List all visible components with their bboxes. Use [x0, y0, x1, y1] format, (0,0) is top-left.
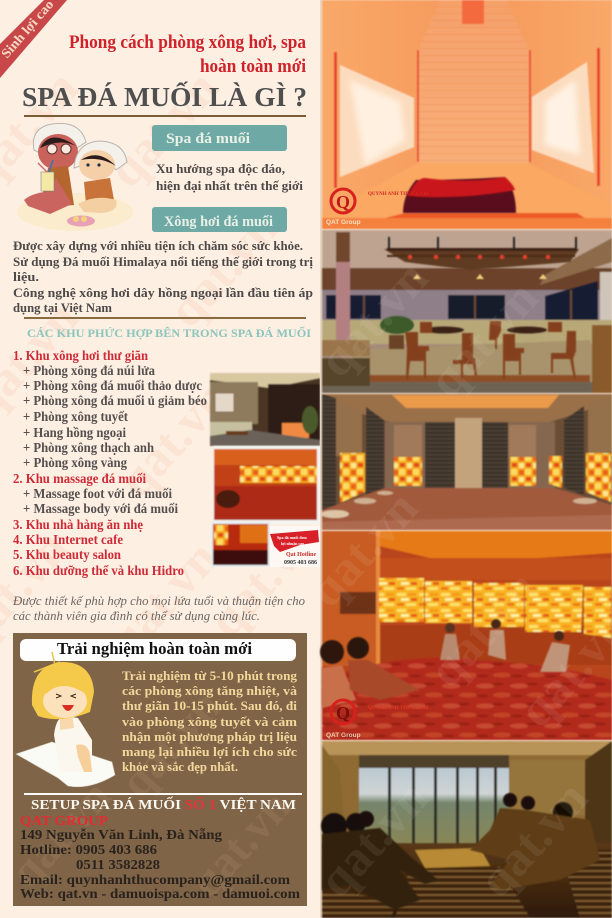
photo watermark: qat.vn	[307, 770, 438, 907]
background watermark: qat.vn	[97, 60, 228, 197]
illustration: towel girl	[16, 652, 115, 787]
panel: new experience and contact: qat.vn	[0, 770, 120, 897]
text: description: liệu.	[13, 269, 39, 284]
contact details: 149 Nguyễn Văn Linh, Đà Nẵng	[20, 827, 222, 842]
red blanket	[403, 177, 516, 213]
text: description: Sử dụng Đá muối Himalaya nổi tiếng thế giới trong trị	[13, 254, 313, 269]
subtitle: Phong cách phòng xông hơi, spa	[69, 33, 306, 53]
list of zones: + Phòng xông đá muối thảo dược	[23, 378, 202, 393]
promo sticker: hotline: lợi nhuận cao	[281, 541, 304, 546]
list of zones	[13, 348, 207, 578]
photo: red room thumbnail	[211, 522, 270, 567]
right boy	[74, 141, 127, 213]
panel: Xông hơi đá muối	[152, 207, 287, 232]
experience text: các phòng xông tăng nhiệt, và	[122, 683, 298, 698]
text: description: Công nghệ xông hơi dây hồng ngoại lần đầu tiên áp	[13, 285, 313, 300]
title block	[22, 33, 307, 112]
contact details	[20, 813, 301, 901]
logo: QAT group: QUYNH ANH THU Co.,Ltd	[368, 192, 429, 197]
photo watermark: qat.vn	[467, 770, 598, 907]
illustration: two spa guests	[17, 123, 133, 231]
logo: QAT group	[326, 189, 429, 226]
photo watermark	[297, 250, 612, 907]
background watermark	[0, 60, 328, 667]
experience text: thư giãn 10-15 phút. Sau đó, đi	[122, 698, 297, 713]
promo sticker: hotline	[270, 526, 320, 567]
logo: QAT group: QUYNH ANH THU Co.,Ltd	[368, 706, 429, 711]
corner ribbon: Sinh lợi cao	[0, 0, 67, 78]
contact details: 0511 3582828	[76, 857, 160, 872]
photo: salt panel room	[321, 394, 612, 530]
list of zones: 6. Khu dưỡng thể và khu Hidro	[13, 563, 184, 578]
background watermark: qat.vn	[97, 530, 228, 667]
left column background	[0, 0, 322, 918]
panel: Spa đá muối	[152, 125, 287, 151]
list of zones: 1. Khu xông hơi thư giãn	[13, 348, 148, 363]
panel heading	[20, 639, 296, 661]
text: description	[13, 238, 313, 315]
photo watermark: qat.vn	[297, 480, 428, 617]
photo watermark: qat.vn	[417, 270, 548, 407]
list of zones: + Massage body với đá muối	[23, 501, 178, 516]
right group of guests	[462, 793, 600, 890]
photo watermark: qat.vn	[417, 560, 548, 697]
text: spa trend: Xu hướng spa độc đáo,	[156, 161, 285, 176]
subtitle	[69, 33, 306, 77]
promo sticker: hotline: 0905 403 686	[284, 560, 317, 566]
experience text: vào phòng xông tuyết và cảm	[122, 714, 297, 729]
pergola	[384, 237, 579, 279]
list of zones: + Phòng xông thạch anh	[23, 440, 154, 455]
list of zones: + Massage foot với đá muối	[23, 486, 172, 501]
background watermark: qat.vn	[157, 200, 288, 337]
promo sticker: hotline: Qat Hotline	[286, 552, 317, 558]
panel: new experience and contact	[0, 633, 307, 907]
text: description: dụng tại Việt Nam	[13, 300, 112, 315]
experience text	[122, 668, 298, 774]
text: spa trend: hiện đại nhất trên thế giới	[156, 178, 303, 193]
list of zones: + Phòng xông tuyết	[23, 409, 128, 424]
panel: new experience and contact: qat.vn	[110, 680, 230, 807]
photo: sauna room	[322, 0, 612, 229]
guests in salt room	[320, 619, 570, 708]
text: description: Được xây dựng với nhiều tiện ích chăm sóc sức khỏe.	[13, 238, 303, 253]
photo: restaurant	[322, 230, 612, 393]
list of zones: + Phòng xông vàng	[23, 455, 127, 470]
contact details: Hotline: 0905 403 686	[20, 842, 157, 857]
note: family friendly: Được thiết kế phù hợp cho mọi lứa tuổi và thuận tiện cho	[12, 594, 306, 608]
bowl	[67, 216, 95, 226]
experience text: nhận một phương pháp trị liệu	[122, 729, 297, 744]
panel: Spa đá muối: Spa đá muối	[166, 131, 250, 147]
photo: lobby	[210, 373, 320, 446]
left girl	[24, 123, 86, 214]
plant	[380, 316, 414, 349]
promo sticker: hotline: Spa đá muối đem	[277, 535, 307, 540]
list of zones: 5. Khu beauty salon	[13, 547, 121, 562]
setup heading: SETUP SPA ĐÁ MUỐI SỐ 1 VIỆT NAM	[31, 795, 296, 813]
experience text: Trải nghiệm từ 5-10 phút trong	[122, 668, 297, 683]
list of zones: 4. Khu Internet cafe	[13, 532, 123, 547]
list of zones: + Phòng xông đá muối ủ giảm béo	[23, 393, 207, 408]
left group of guests	[321, 811, 438, 910]
panel: new experience and contact: qat.vn	[180, 780, 300, 907]
logo: QAT group	[326, 700, 429, 739]
note: family friendly: các thành viên gia đình có thể sử dụng cùng lúc.	[13, 609, 260, 623]
dining tables and chairs	[405, 321, 576, 380]
list of zones: + Phòng xông đá núi lửa	[23, 363, 155, 378]
list of zones: + Hang hồng ngoại	[23, 425, 126, 440]
section heading: complexes: CÁC KHU PHỨC HỢP BÊN TRONG SPA ĐÁ MUỐI	[27, 325, 311, 340]
contact details: Web: qat.vn - damuoispa.com - damuoi.com	[20, 886, 301, 901]
text: spa trend	[156, 161, 303, 193]
photo: panorama window lounge	[321, 741, 612, 918]
contact details: QAT GROUP	[20, 813, 108, 828]
logo: QAT group: QAT Group	[326, 732, 361, 739]
experience text: mang lại nhiều lợi ích cho sức	[122, 744, 297, 759]
background watermark: qat.vn	[197, 510, 328, 647]
panel: Xông hơi đá muối: Xông hơi đá muối	[164, 214, 273, 230]
list of zones: 3. Khu nhà hàng ăn nhẹ	[13, 517, 143, 532]
note: family friendly	[12, 594, 306, 623]
photo: salt bath with guests	[320, 531, 612, 740]
subtitle: hoàn toàn mới	[200, 57, 306, 77]
photo: salt room thumbnail	[213, 446, 320, 524]
main heading: SPA ĐÁ MUỐI LÀ GÌ ?	[22, 81, 307, 112]
panel heading: Trải nghiệm hoàn toàn mới	[57, 639, 252, 658]
logo: QAT group: Q	[336, 703, 350, 723]
logo: QAT group: Q	[336, 192, 350, 212]
list of zones: 2. Khu massage đá muối	[13, 471, 146, 486]
divider strip between columns	[320, 0, 322, 918]
background watermark: qat.vn	[107, 370, 238, 507]
contact details: Email: quynhanhthucompany@gmail.com	[20, 872, 291, 887]
experience text: khỏe và sắc đẹp nhất.	[122, 759, 238, 774]
photo watermark: qat.vn	[307, 250, 438, 387]
logo: QAT group: QAT Group	[326, 219, 361, 226]
